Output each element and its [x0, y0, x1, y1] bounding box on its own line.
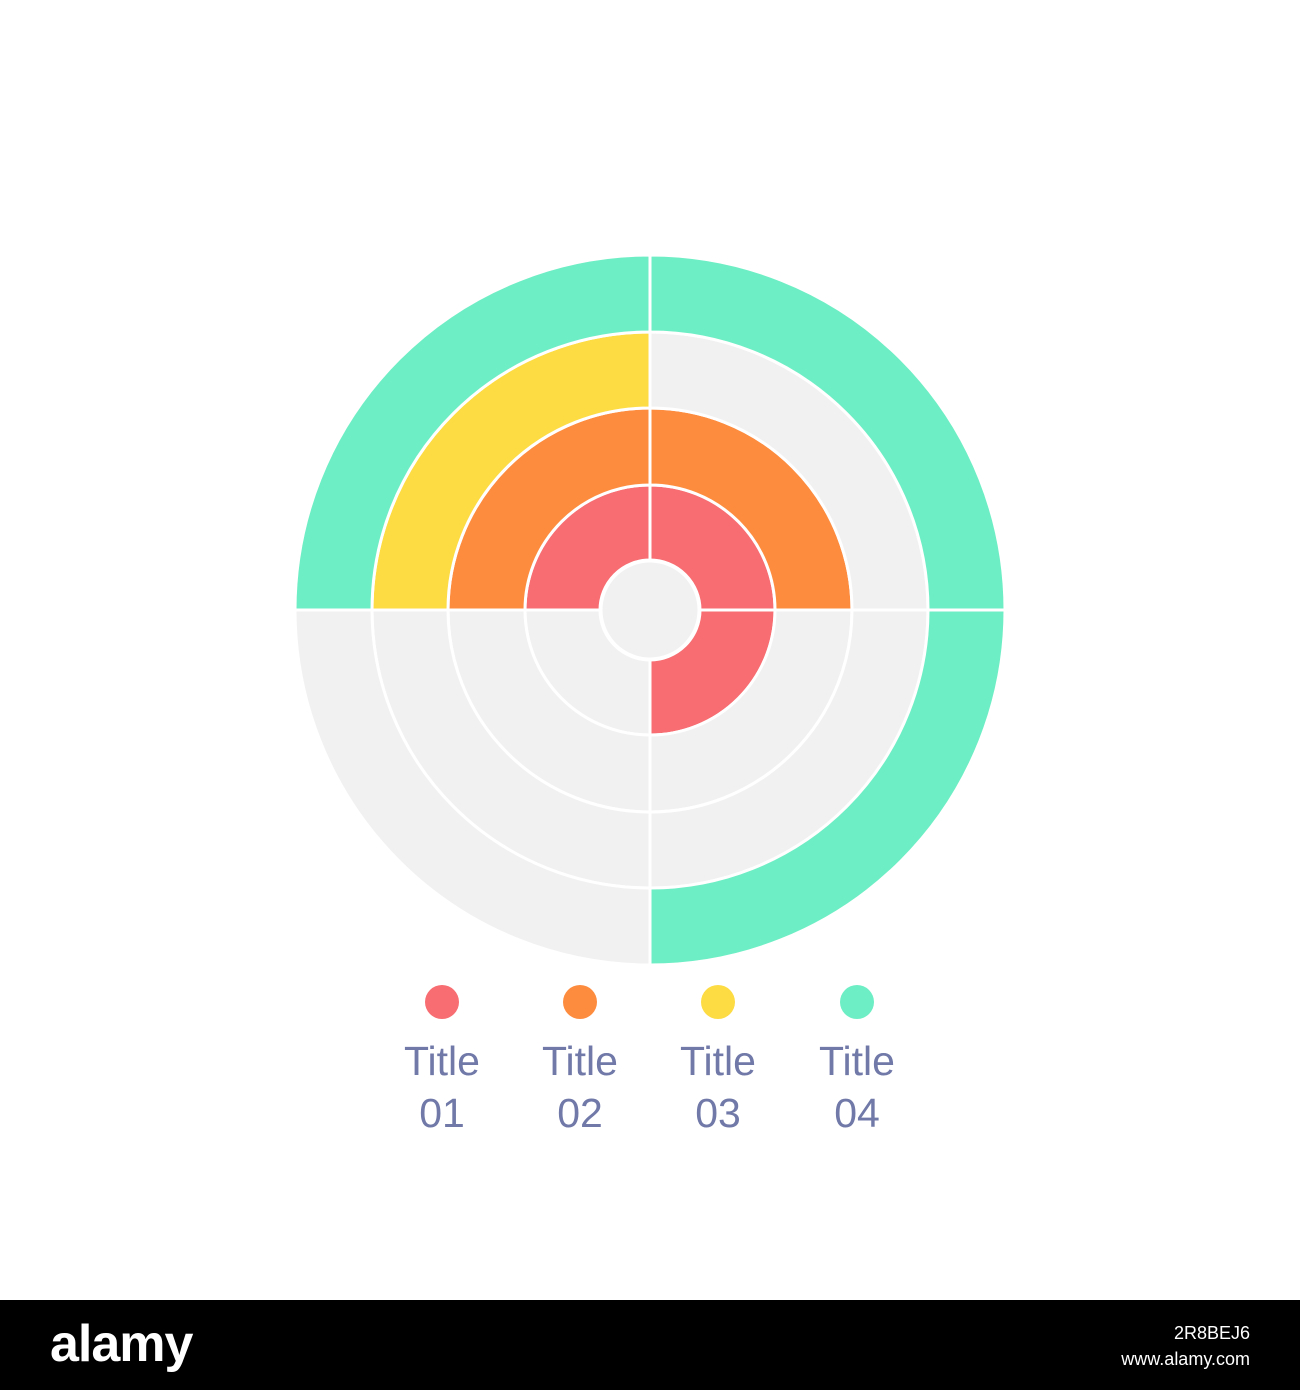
ring 4 outer [295, 255, 1005, 965]
footer info: 2R8BEJ6 [1174, 1323, 1250, 1343]
legend: title 01: 01 [419, 1090, 465, 1136]
center circle [601, 561, 699, 659]
legend: title 01: Title [404, 1038, 480, 1084]
legend: title 01 [404, 985, 480, 1136]
footer info [1121, 1323, 1250, 1369]
footer info: www.alamy.com [1121, 1349, 1250, 1369]
footer logo: alamy [50, 1315, 192, 1373]
ring 3 [372, 332, 928, 888]
legend: title 02: Title [542, 1038, 618, 1084]
legend: title 04: Title [819, 1038, 895, 1084]
radial chart [296, 256, 1004, 964]
legend: title 04: 04 [834, 1090, 880, 1136]
legend: title 03: Title [680, 1038, 756, 1084]
legend: title 03 [680, 985, 756, 1136]
legend: title 02 [542, 985, 618, 1136]
legend: title 03: 03 [695, 1090, 741, 1136]
legend: title 04 [819, 985, 895, 1136]
footer bar [0, 1300, 1300, 1390]
legend: title 02: 02 [557, 1090, 603, 1136]
ring 2 [448, 408, 852, 812]
ring 1 inner [525, 485, 775, 735]
